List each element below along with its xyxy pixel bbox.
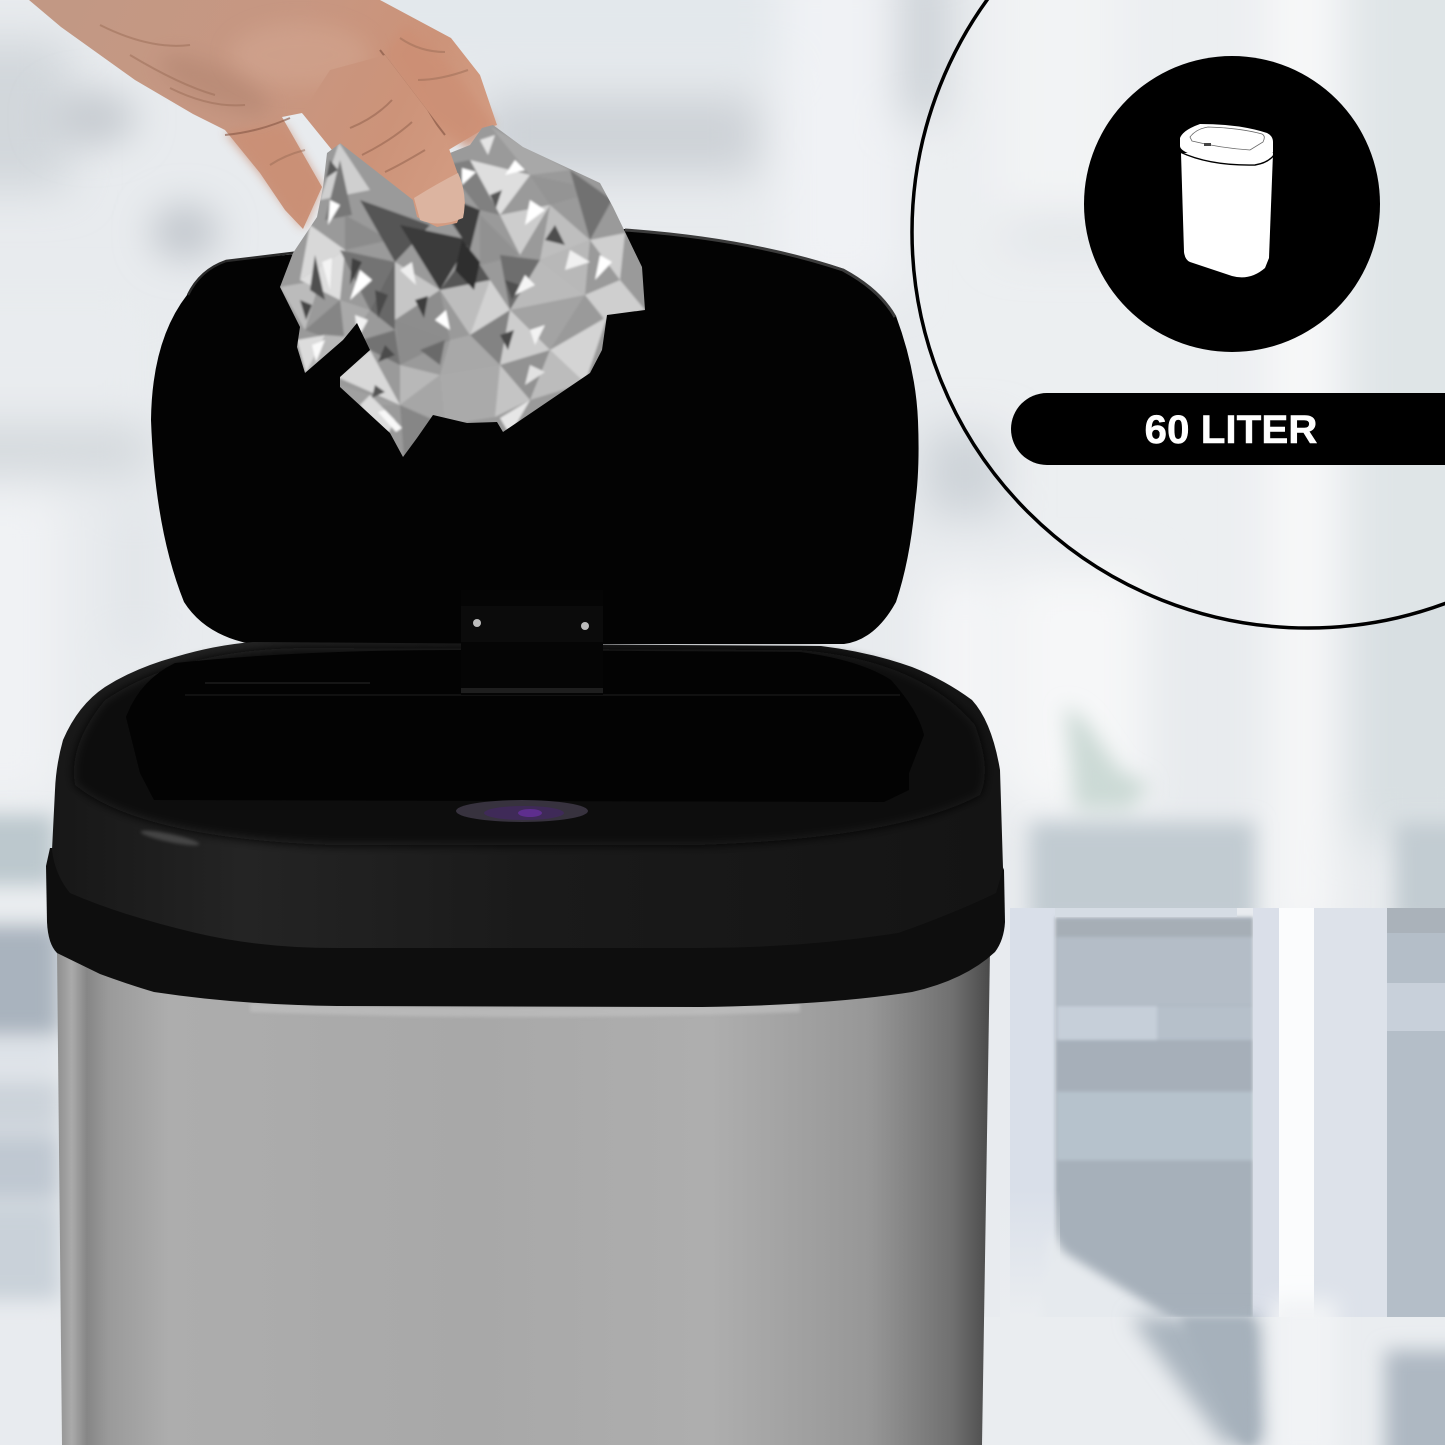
callout: capacity circle — [912, 0, 1445, 628]
open lid — [151, 229, 919, 644]
crumpled aluminium foil — [270, 120, 650, 465]
rim top surface — [74, 648, 985, 845]
bin opening interior — [126, 650, 924, 802]
hand — [29, 0, 497, 229]
lower black band of the rim — [46, 848, 1005, 1007]
rim highlight — [140, 828, 200, 848]
icon: white trash can silhouette — [1180, 124, 1274, 277]
lower right window panels — [986, 908, 1445, 1330]
front finger over the foil — [302, 55, 465, 227]
fingernail — [414, 173, 465, 224]
motion sensor window — [456, 800, 588, 822]
trash can body: brushed steel — [57, 950, 990, 1445]
lid hinge — [461, 590, 603, 695]
floor reflection below panels — [984, 1300, 1445, 1445]
capacity pill label — [1011, 393, 1445, 465]
upper rim of the can — [52, 642, 1003, 948]
capacity pill label: 60 LITER — [1144, 408, 1318, 452]
icon: black badge with trash can — [1084, 56, 1380, 352]
